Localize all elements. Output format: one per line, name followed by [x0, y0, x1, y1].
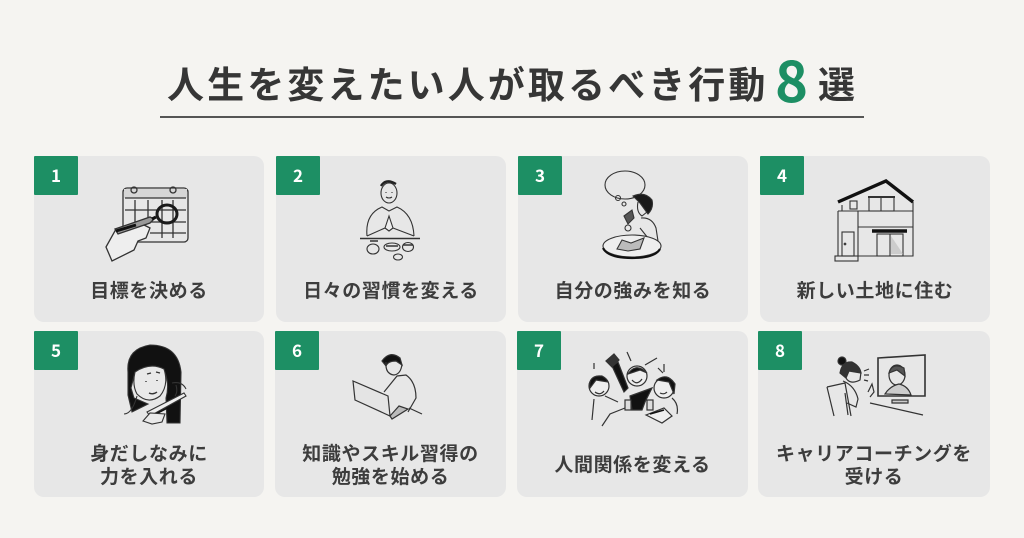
panel: キャリアコーチングを受ける: [758, 331, 990, 497]
badge 5: 5: [51, 337, 61, 362]
label: 目標を決める: [90, 276, 208, 303]
badge 3: [518, 156, 562, 195]
label: キャリアコーチングを: [776, 439, 972, 466]
icon: calendar and hand: [105, 186, 189, 262]
title: 8: [775, 38, 808, 119]
label: 身だしなみに: [90, 439, 208, 466]
label: 人間関係を変える: [554, 450, 711, 477]
label: 知識やスキル習得の: [302, 439, 479, 466]
panel: 日々の習慣を変える: [276, 156, 506, 322]
badge 8: [758, 331, 802, 370]
label: [302, 439, 479, 489]
label: 新しい土地に住む: [797, 276, 953, 303]
badge 1: 1: [51, 162, 61, 187]
badge 4: 4: [777, 162, 787, 187]
icon: woman with hair iron: [124, 344, 187, 425]
label: [90, 439, 208, 489]
title: 人生を変えたい人が取るべき行動: [167, 55, 768, 109]
icon: person praying before a meal: [360, 180, 420, 260]
label: [776, 439, 972, 489]
icon: house: [834, 179, 914, 262]
badge 7: 7: [534, 337, 544, 362]
badge 3: 3: [535, 162, 545, 187]
icon: three friends celebrating: [588, 352, 678, 426]
label: 勉強を始める: [332, 462, 449, 489]
badge 2: 2: [293, 162, 303, 187]
label: 受ける: [845, 462, 903, 489]
badge 6: [275, 331, 319, 370]
badge 6: 6: [292, 337, 302, 362]
panel: 知識やスキル習得の勉強を始める: [275, 331, 506, 497]
title: [167, 38, 855, 119]
label: 自分の強みを知る: [555, 276, 711, 303]
label: 日々の習慣を変える: [303, 276, 479, 303]
badge 7: [517, 331, 561, 370]
badge 2: [276, 156, 320, 195]
icon: person thinking over a book: [602, 170, 662, 260]
badge 1: [34, 156, 78, 195]
badge 5: [34, 331, 78, 370]
panel: 目標を決める: [34, 156, 264, 322]
badge 8: 8: [775, 337, 785, 362]
badge 4: [760, 156, 804, 195]
icon: woman in online coaching: [826, 354, 926, 416]
icon: person at laptop: [352, 354, 422, 420]
panel: 新しい土地に住む: [760, 156, 990, 322]
panel: 自分の強みを知る: [518, 156, 748, 322]
panel: 人間関係を変える: [517, 331, 748, 497]
panel: 身だしなみに力を入れる: [34, 331, 264, 497]
title: 選: [818, 55, 855, 109]
label: 力を入れる: [100, 462, 198, 489]
